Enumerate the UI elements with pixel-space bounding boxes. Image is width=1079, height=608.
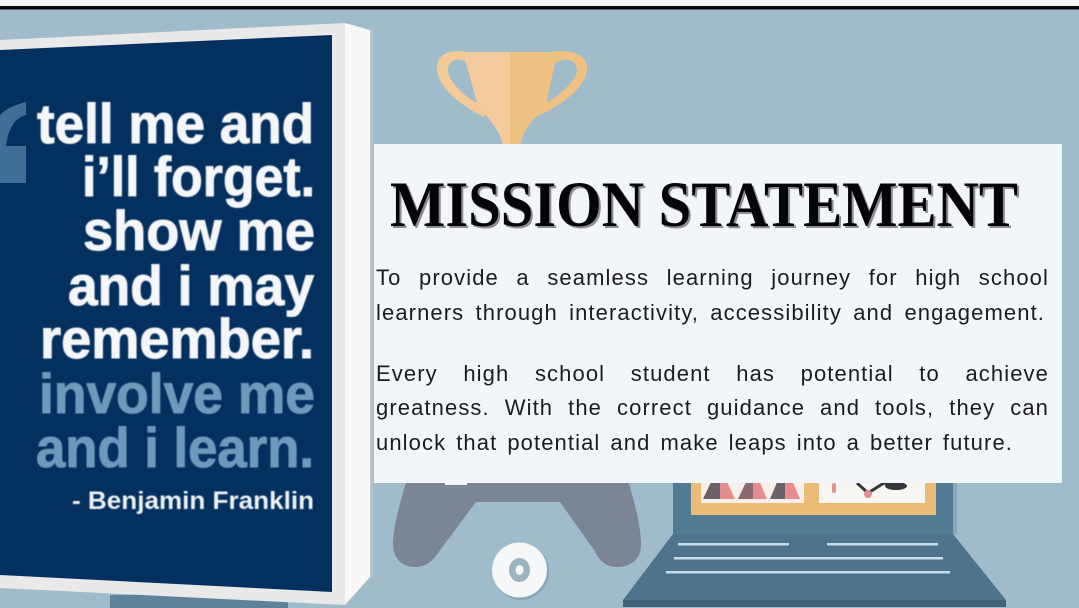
book: [0, 23, 373, 605]
paragraph line 3: Every high school student has potential to achieve: [376, 361, 1049, 386]
quote text: and i learn.: [36, 416, 314, 479]
quote text: i’ll forget.: [82, 145, 315, 208]
icon: game controller: [393, 470, 641, 567]
quote text: and i may: [68, 254, 314, 317]
quote text: show me: [83, 199, 315, 262]
quote text: remember.: [40, 307, 314, 370]
paragraph line 2: learners through interactivity, accessibility and engagement.: [376, 300, 1045, 325]
icon: laptop: [623, 470, 1006, 607]
strip below book: [110, 595, 288, 608]
quote text: - Benjamin Franklin: [72, 487, 314, 515]
book cover: [0, 35, 332, 592]
text block: mission paragraphs: [376, 265, 1049, 455]
quote text: involve me: [39, 362, 315, 425]
paragraph line 5: unlock that potential and make leaps into a better future.: [376, 430, 1013, 455]
panel: mission statement: [374, 144, 1062, 483]
quote text: [36, 92, 315, 515]
icon: trophy: [437, 51, 587, 146]
paragraph line 1: To provide a seamless learning journey for high school: [376, 265, 1049, 290]
book front border: [0, 23, 345, 605]
quote text: tell me and: [37, 92, 314, 155]
icon: disc: [492, 542, 549, 600]
book side: [345, 23, 370, 605]
quotation mark: [0, 102, 26, 183]
title: MISSION STATEMENT: [390, 169, 1018, 241]
paragraph line 4: greatness. With the correct guidance and tools, they can: [376, 395, 1049, 420]
